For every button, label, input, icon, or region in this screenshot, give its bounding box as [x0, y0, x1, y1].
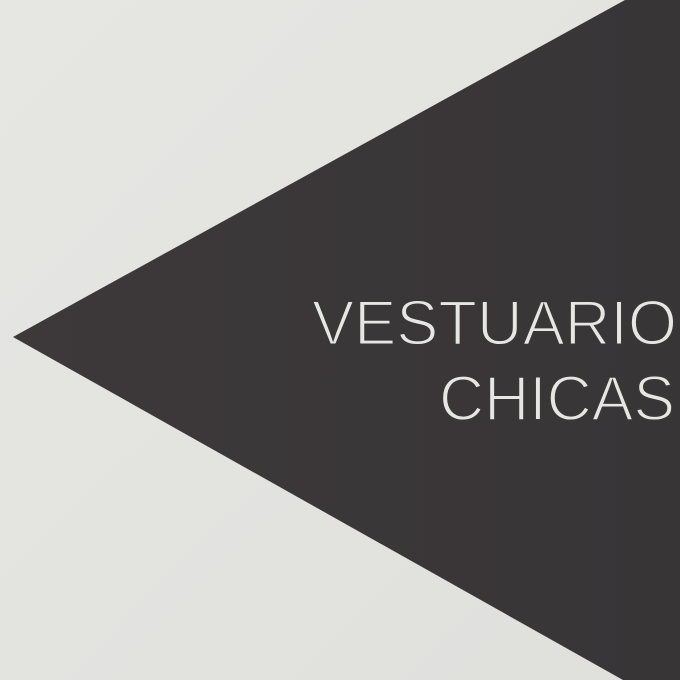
text line: VESTUARIO: VESTUARIO — [312, 288, 677, 358]
label text: VESTUARIO CHICAS — [312, 288, 677, 434]
text line: CHICAS: CHICAS — [439, 364, 675, 434]
